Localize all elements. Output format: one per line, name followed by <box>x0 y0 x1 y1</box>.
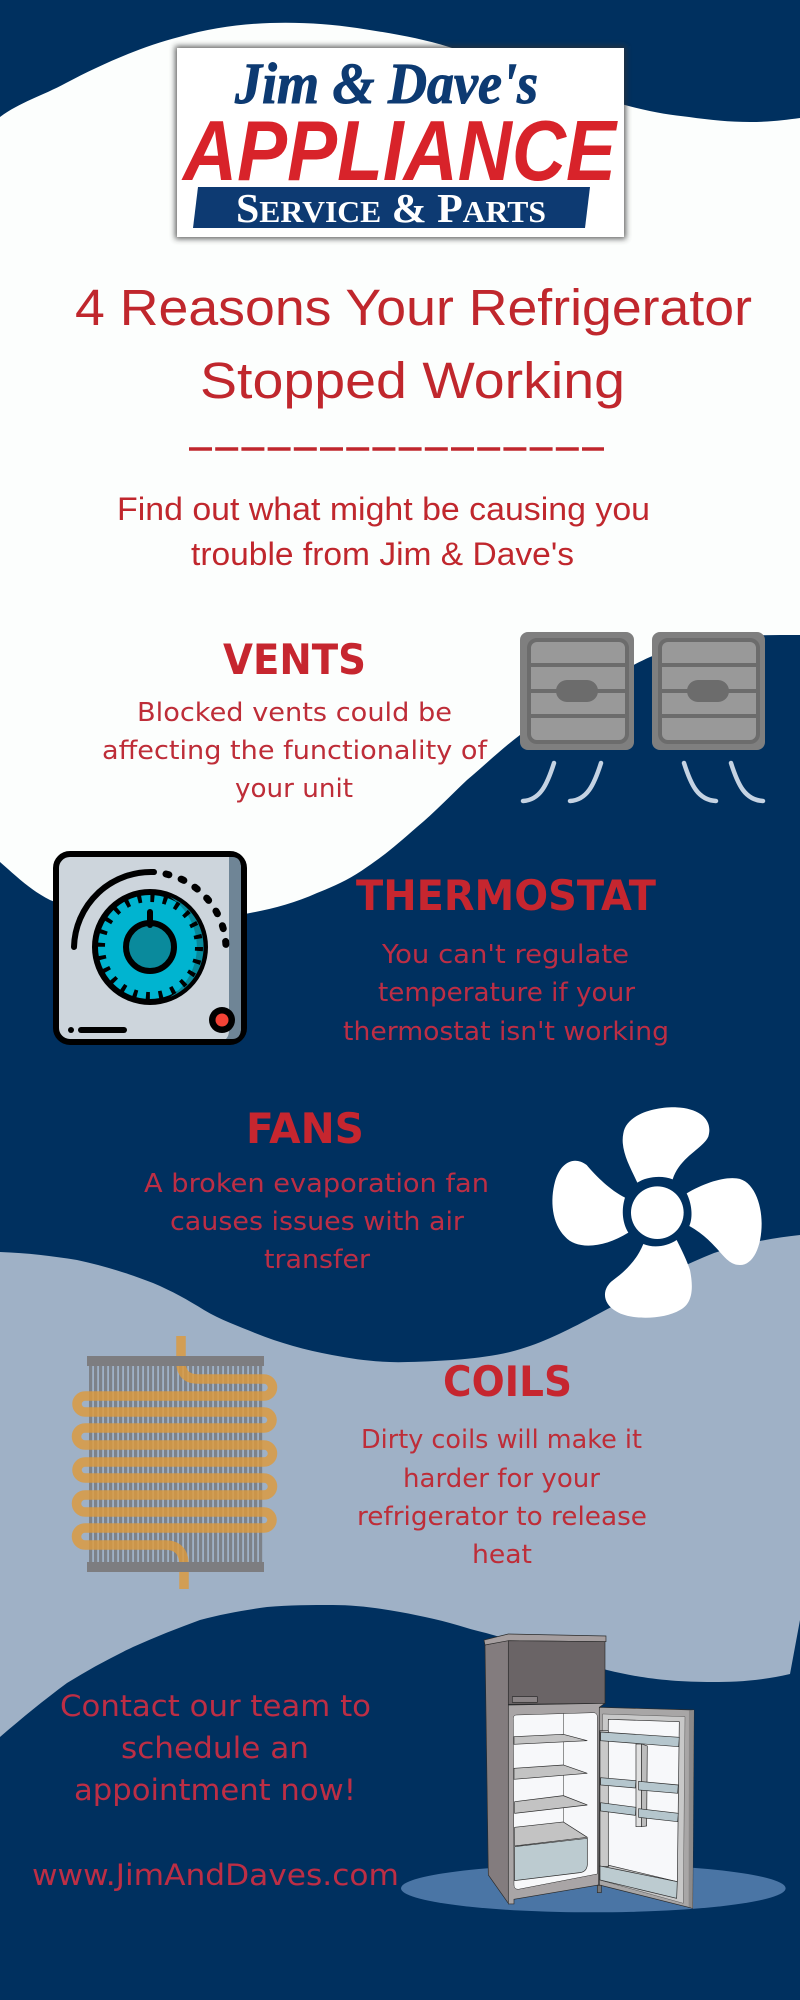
logo: SERVICE & PARTS <box>236 185 546 231</box>
icon: coils <box>76 1336 272 1589</box>
subtitle: trouble from Jim & Dave's <box>191 536 574 572</box>
thermostat text: thermostat isn't working <box>343 1017 669 1047</box>
icon: fan <box>552 1107 762 1318</box>
coils text: Dirty coils will make it <box>361 1425 642 1455</box>
coils heading: COILS <box>443 1357 572 1406</box>
call to action: Contact our team to <box>60 1689 371 1723</box>
fans text <box>144 1169 489 1275</box>
dashed divider <box>189 447 604 451</box>
call to action: appointment now! <box>74 1773 356 1807</box>
fans text: A broken evaporation fan <box>144 1169 489 1199</box>
logo <box>175 46 626 239</box>
coils text: refrigerator to release <box>357 1502 647 1532</box>
website: www.JimAndDaves.com <box>32 1858 399 1892</box>
subtitle <box>117 491 650 572</box>
panel: coils <box>357 1357 647 1570</box>
thermostat text <box>343 940 669 1047</box>
background wave: white <box>0 23 800 922</box>
thermostat text: You can't regulate <box>381 940 629 970</box>
call to action <box>60 1689 371 1807</box>
vents text: your unit <box>235 774 353 804</box>
vents text: affecting the functionality of <box>102 736 488 766</box>
call to action: schedule an <box>121 1731 309 1765</box>
vents heading: VENTS <box>223 635 366 684</box>
title <box>75 279 752 409</box>
background wave: light blue <box>0 1235 800 1737</box>
title: 4 Reasons Your Refrigerator <box>75 279 752 336</box>
thermostat heading: THERMOSTAT <box>356 871 656 920</box>
panel: vents <box>102 635 488 804</box>
vents text: Blocked vents could be <box>137 698 452 728</box>
logo: APPLIANCE <box>181 104 618 199</box>
fans text: transfer <box>264 1245 370 1275</box>
title: Stopped Working <box>200 352 625 409</box>
fans text: causes issues with air <box>170 1207 464 1237</box>
panel: fans <box>144 1104 489 1275</box>
fans heading: FANS <box>246 1104 364 1153</box>
coils text <box>357 1425 647 1570</box>
subtitle: Find out what might be causing you <box>117 491 650 527</box>
icon: open refrigerator <box>401 1634 786 1912</box>
icon: thermostat <box>56 854 244 1042</box>
coils text: heat <box>472 1540 532 1570</box>
thermostat text: temperature if your <box>378 978 635 1008</box>
vents text <box>102 698 488 804</box>
panel: thermostat <box>343 871 669 1047</box>
logo: Jim & Dave's <box>234 51 538 116</box>
icon: vents <box>520 632 765 801</box>
coils text: harder for your <box>403 1464 600 1494</box>
